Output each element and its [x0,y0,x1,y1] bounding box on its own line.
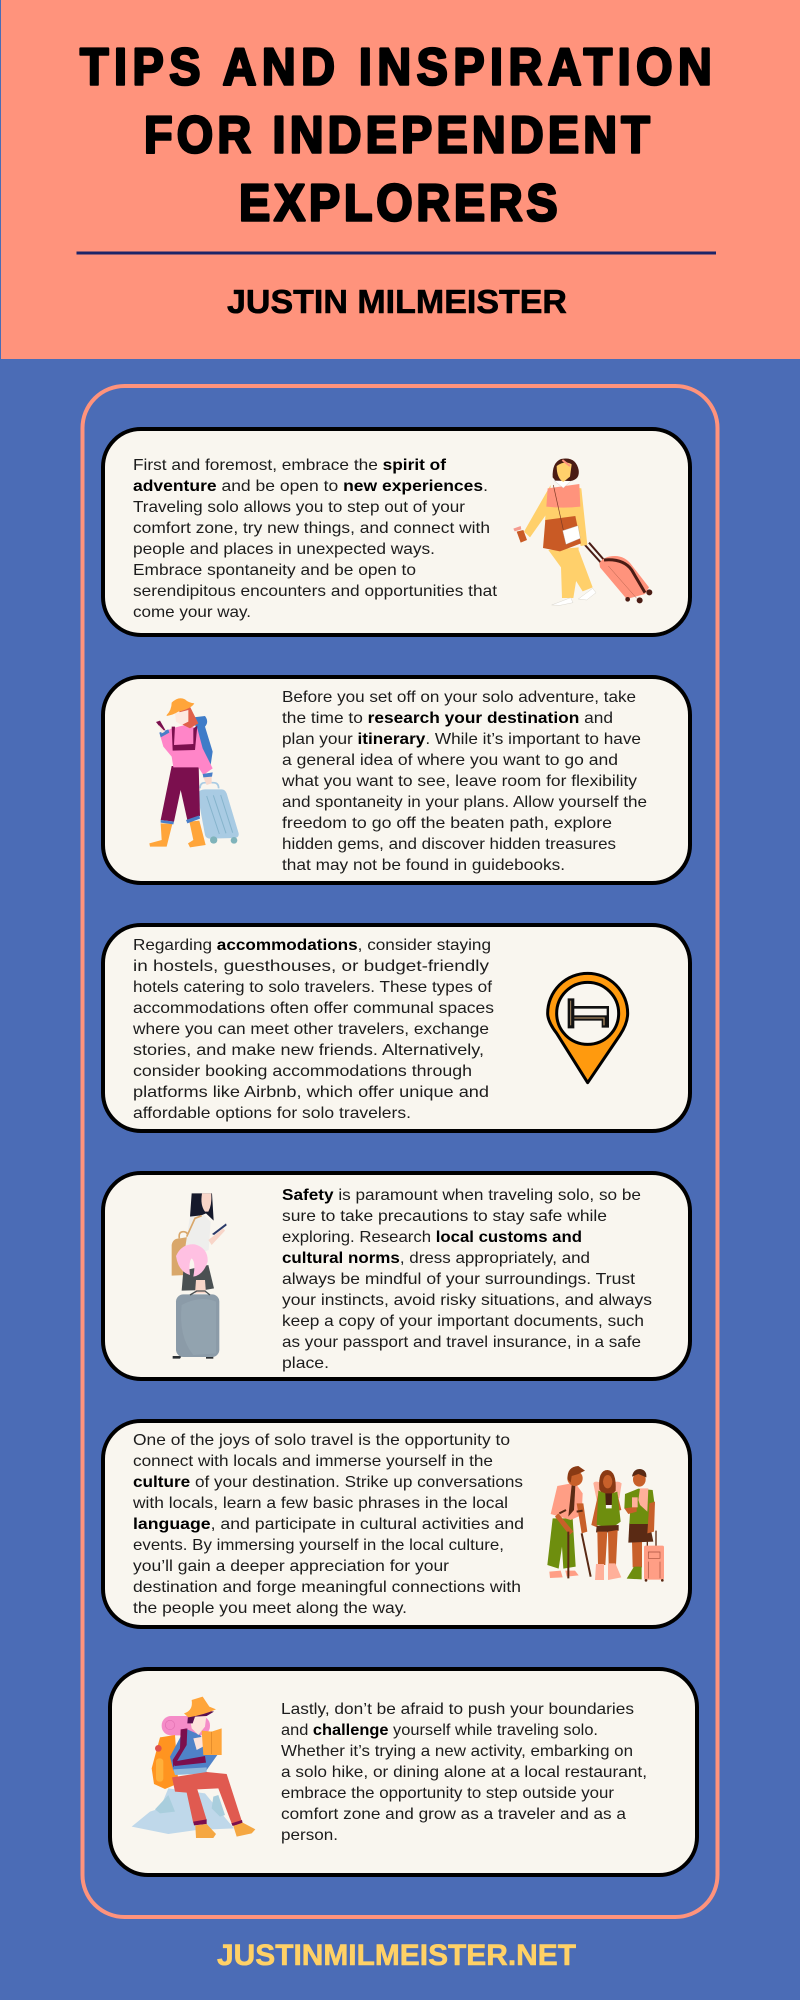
text block: accommodations: hotels catering to solo travelers. These types of [133,979,493,996]
text block: push your boundaries: and challenge yourself while traveling solo. [281,1722,598,1739]
icon: woman with neck pillow and suitcase [172,1193,227,1359]
text block: safety: cultural norms , dress appropriately, and [282,1250,590,1267]
text block: safety: as your passport and travel insurance, in a safe [282,1334,641,1351]
text block: research your destination: what you want to see, leave room for flexibility [281,773,637,790]
text block: spirit of adventure: First and foremost, embrace the spirit of [133,457,447,474]
text block: safety: sure to take precautions to stay safe while [282,1208,607,1225]
icon: hiker with phone and suitcase [149,698,239,847]
text block: push your boundaries [281,1701,647,1844]
title: FOR INDEPENDENT [144,106,650,164]
text block: spirit of adventure: comfort zone, try new things, and connect with [133,520,490,537]
text block: research your destination: the time to research your destination and [282,710,613,727]
text block: connect with locals: language , and participate in cultural activities and [133,1516,524,1533]
text block: spirit of adventure: people and places in unexpected ways. [133,541,435,558]
text block: research your destination: freedom to go off the beaten path, explore [282,815,612,832]
text block: accommodations: consider booking accommodations through [133,1063,472,1080]
text block: accommodations: Regarding accommodations , consider staying [133,937,491,954]
text block: accommodations: where you can meet other travelers, exchange [132,1021,489,1038]
text block: research your destination: Before you set off on your solo adventure, take [282,689,636,706]
text block: research your destination: that may not be found in guidebooks. [282,857,565,874]
text block: connect with locals: you’ll gain a deeper appreciation for your [133,1558,449,1575]
text block: push your boundaries: person. [281,1827,338,1844]
text block: spirit of adventure: Traveling solo allows you to step out of your [133,499,465,516]
text block: connect with locals [132,1432,524,1617]
text block: push your boundaries: Lastly, don’t be afraid to push your boundaries [281,1701,634,1718]
text block: research your destination [281,689,647,874]
panel: spirit of adventure [103,429,690,635]
text block: accommodations: stories, and make new friends. Alternatively, [133,1042,484,1059]
text block: research your destination: a general idea of where you want to go and [282,752,618,769]
text block: connect with locals: destination and forge meaningful connections with [133,1579,521,1596]
panel: push your boundaries [110,1669,697,1875]
text block: spirit of adventure: adventure and be open to new experiences . [133,478,488,495]
panel: accommodations [103,925,690,1131]
text block: safety: place. [282,1355,329,1372]
text block: accommodations [132,937,494,1122]
text block: connect with locals: connect with locals and immerse yourself in the [133,1453,493,1470]
panel: safety [103,1173,690,1379]
outer frame [82,386,718,1917]
panel: research your destination [103,677,690,883]
text block: connect with locals: One of the joys of solo travel is the opportunity to [133,1432,510,1449]
text block: safety: always be mindful of your surroundings. Trust [282,1271,636,1288]
icon: woman with suitcase [513,458,652,605]
title: EXPLORERS [239,174,558,232]
text block: spirit of adventure: serendipitous encounters and opportunities that [133,583,498,600]
text block: push your boundaries: Whether it’s trying a new activity, embarking on [281,1743,633,1760]
text block: accommodations: affordable options for solo travelers. [133,1105,411,1122]
text block: spirit of adventure: come your way. [133,604,251,621]
text block: spirit of adventure: Embrace spontaneity and be open to [133,562,416,579]
title: TIPS AND INSPIRATION [80,38,712,96]
text block: safety [282,1187,652,1372]
footer website: JUSTINMILMEISTER.NET [217,1939,576,1972]
text block: push your boundaries: a solo hike, or dining alone at a local restaurant, [281,1764,647,1781]
text block: accommodations: platforms like Airbnb, which offer unique and [133,1084,489,1101]
text block: safety: keep a copy of your important documents, such [282,1313,644,1330]
header panel [1,0,800,359]
text block: research your destination: hidden gems, and discover hidden treasures [282,836,616,853]
panel: connect with locals [103,1421,690,1627]
text block: research your destination: plan your itinerary . While it’s important to have [282,731,641,748]
text block: connect with locals: the people you meet along the way. [133,1600,407,1617]
text block: research your destination: and spontaneity in your plans. Allow yourself the [282,794,647,811]
text block: push your boundaries: embrace the opportunity to step outside your [281,1785,614,1802]
title [80,38,712,232]
text block: accommodations: accommodations often offer communal spaces [133,1000,494,1017]
author name: JUSTIN MILMEISTER [227,284,567,321]
text block: spirit of adventure [133,457,498,621]
text block: safety: your instincts, avoid risky situations, and always [282,1292,652,1309]
text block: connect with locals: culture of your destination. Strike up conversations [133,1474,523,1491]
icon: map pin with bed [548,973,628,1083]
text block: connect with locals: with locals, learn a few basic phrases in the local [132,1495,508,1512]
text block: connect with locals: events. By immersing yourself in the local culture, [133,1537,504,1554]
text block: safety: exploring. Research local customs and [282,1229,582,1246]
text block: safety: Safety is paramount when traveling solo, so be [282,1187,641,1204]
text block: push your boundaries: comfort zone and grow as a traveler and as a [281,1806,626,1823]
icon: hiker sitting on rock with map [132,1697,255,1838]
text block: accommodations: in hostels, guesthouses, or budget-friendly [133,958,489,975]
icon: group of three travelers [547,1466,664,1582]
